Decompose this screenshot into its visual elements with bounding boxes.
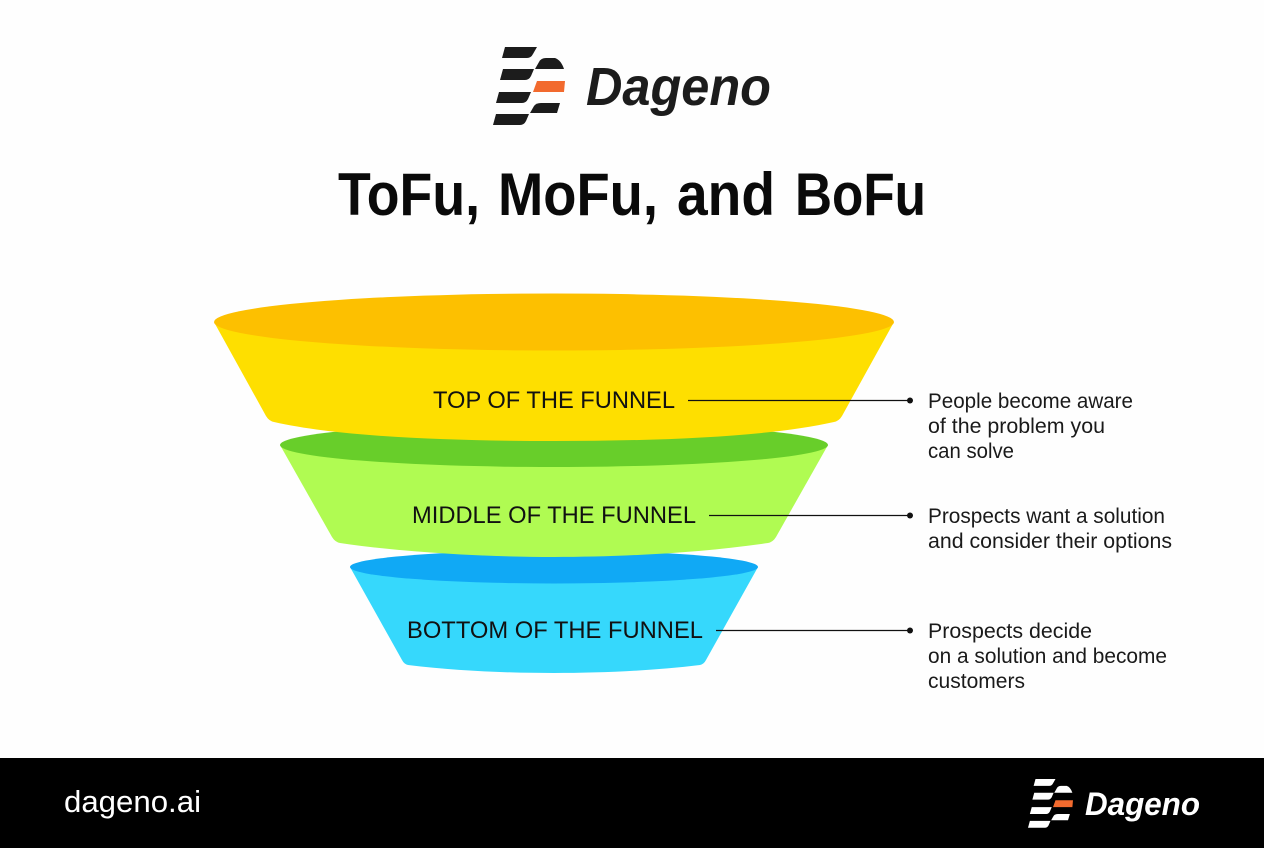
callout: bottom: Prospects decide <box>928 620 1092 643</box>
callout: middle <box>709 505 1172 553</box>
label: bottom of the funnel: BOTTOM OF THE FUNNEL <box>407 617 703 644</box>
footer url: dageno.ai <box>64 784 201 819</box>
callout: top <box>688 390 1133 463</box>
callout: top: of the problem you <box>928 415 1105 438</box>
footer wordmark: Dageno <box>1085 786 1200 822</box>
icon: Dageno mark <box>493 47 565 125</box>
title <box>338 161 926 228</box>
callout: top: can solve <box>928 440 1014 463</box>
funnel tier: middle <box>280 423 828 557</box>
title: MoFu, <box>498 161 658 228</box>
label: middle of the funnel: MIDDLE OF THE FUNNEL <box>412 502 696 529</box>
callout: bottom: customers <box>928 670 1025 693</box>
title: BoFu <box>795 161 926 228</box>
callout: middle: and consider their options <box>928 530 1172 553</box>
callout: top: People become aware <box>928 390 1133 413</box>
footer logo <box>1028 779 1200 828</box>
callout: bottom <box>716 620 1167 693</box>
icon: Dageno mark white <box>1028 779 1073 828</box>
funnel <box>214 294 894 673</box>
title: and <box>677 161 775 228</box>
callout: bottom: on a solution and become <box>928 645 1167 668</box>
title: ToFu, <box>338 161 480 228</box>
label: top of the funnel: TOP OF THE FUNNEL <box>433 387 675 414</box>
footer <box>0 758 1264 848</box>
callout: middle: Prospects want a solution <box>928 505 1165 528</box>
wordmark: Dageno <box>586 57 771 117</box>
funnel tier: bottom <box>350 550 758 673</box>
top logo <box>493 47 771 125</box>
funnel tier: top <box>214 294 894 441</box>
